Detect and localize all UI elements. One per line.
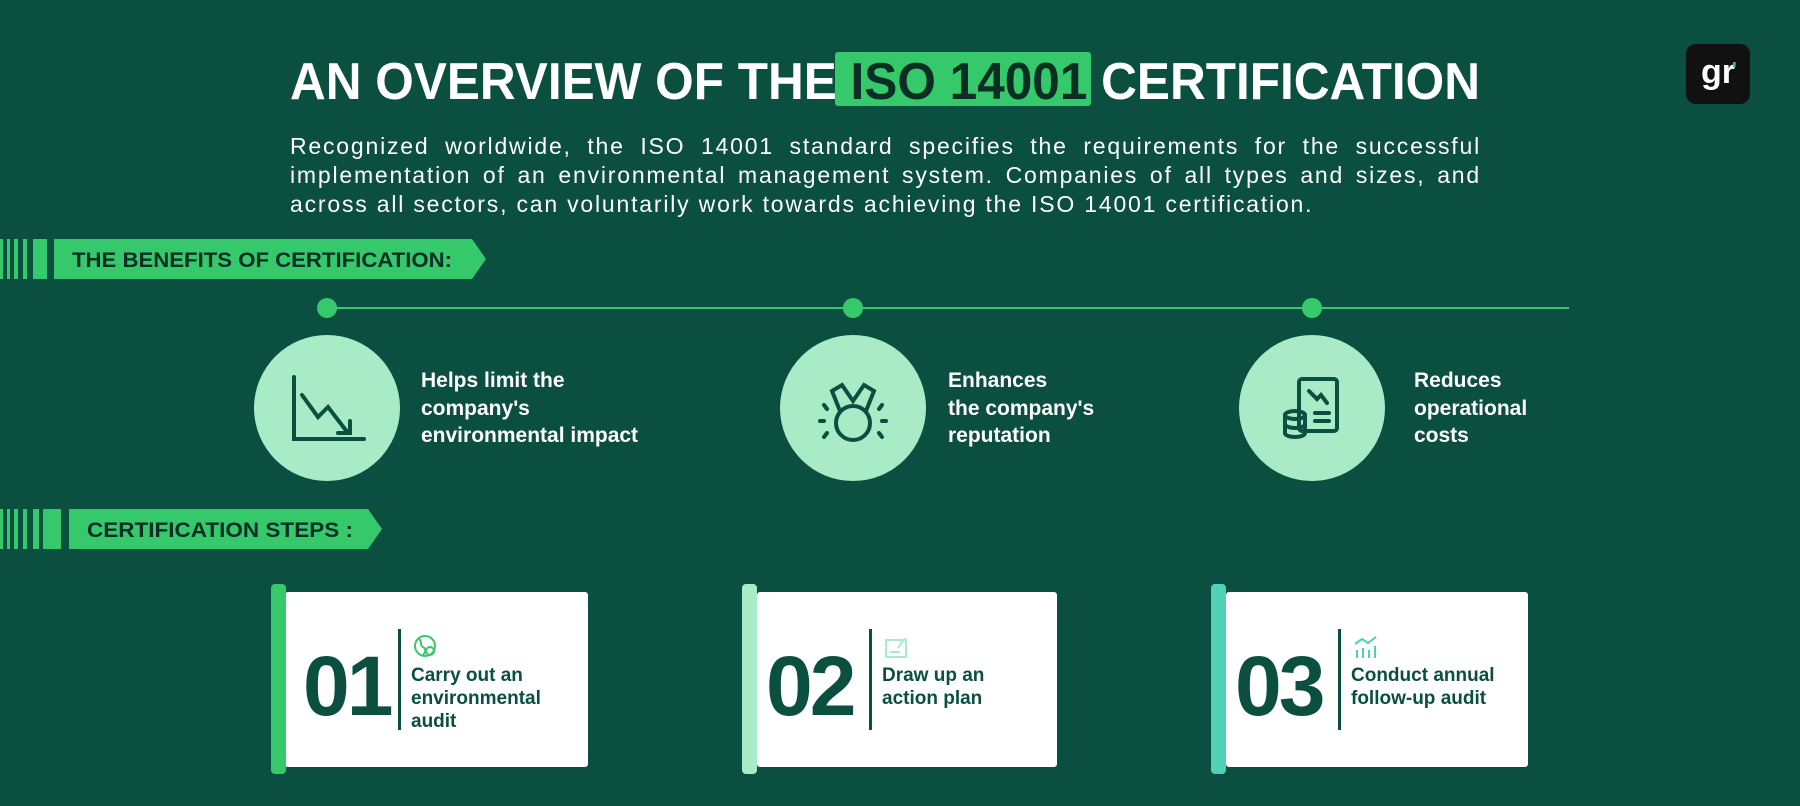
icon: costs document — [1239, 335, 1385, 481]
benefit 1: company's — [421, 396, 530, 420]
step 1: 01 — [303, 639, 390, 733]
intro paragraph: implementation of an environmental management system. Companies of all types and sizes, and — [290, 162, 1481, 188]
step 2 — [742, 584, 1057, 774]
logo: ' — [1732, 59, 1737, 81]
highlight: ISO 14001 — [835, 52, 1091, 106]
step 3: 03 — [1235, 639, 1322, 733]
step 3 — [1211, 584, 1528, 774]
icon: chart — [1354, 636, 1376, 658]
benefit 3 — [1239, 335, 1527, 481]
logo — [1686, 44, 1750, 104]
benefit 1 — [254, 335, 638, 481]
benefit 1: Helps limit the — [421, 369, 565, 392]
icon: globe — [414, 635, 436, 657]
step 2: 02 — [766, 639, 853, 733]
banner: benefits: THE BENEFITS OF CERTIFICATION: — [72, 249, 452, 272]
step 1 — [271, 584, 588, 774]
icon: plan — [885, 638, 907, 658]
step 1: audit — [411, 711, 456, 732]
benefit 3: Reduces — [1414, 369, 1502, 392]
banner: benefits — [0, 239, 486, 279]
benefit 2: Enhances — [948, 369, 1047, 392]
icon: medal — [780, 335, 926, 481]
step 3: follow-up audit — [1351, 688, 1486, 709]
step 2: action plan — [882, 688, 982, 709]
title: AN OVERVIEW OF THE ISO 14001 CERTIFICATION — [290, 53, 1480, 111]
step 3: Conduct annual — [1351, 665, 1495, 686]
benefit 2 — [780, 335, 1094, 481]
benefit 2: reputation — [948, 424, 1051, 447]
benefit 3: costs — [1414, 424, 1469, 447]
banner: steps: CERTIFICATION STEPS : — [87, 519, 353, 542]
intro paragraph — [290, 133, 1481, 217]
step 1: environmental — [411, 688, 541, 709]
intro paragraph: Recognized worldwide, the ISO 14001 standard specifies the requirements for the successful — [290, 133, 1481, 159]
benefit 1: environmental impact — [421, 424, 638, 447]
banner: steps — [0, 509, 382, 549]
intro paragraph: across all sectors, can voluntarily work towards achieving the ISO 14001 certification. — [290, 191, 1313, 217]
timeline — [317, 298, 1569, 318]
logo: gr — [1701, 53, 1735, 91]
step 2: Draw up an — [882, 665, 984, 686]
benefit 2: the company's — [948, 396, 1094, 420]
icon: declining chart — [254, 335, 400, 481]
step 1: Carry out an — [411, 665, 523, 686]
benefit 3: operational — [1414, 396, 1527, 420]
